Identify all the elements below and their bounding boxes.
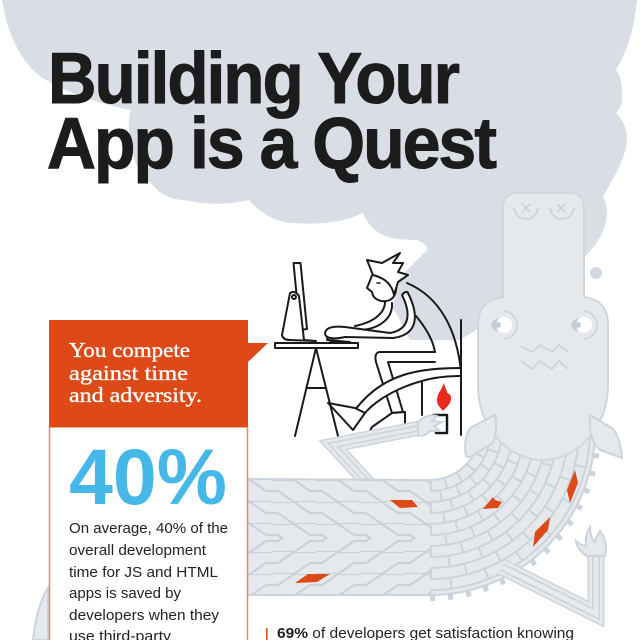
scale pattern: upper straight <box>60 480 431 538</box>
chair and wall <box>422 320 461 435</box>
monster head and neck <box>465 193 622 460</box>
top eyes closed <box>514 204 574 219</box>
monster tail <box>33 588 48 640</box>
front leg and foot <box>328 368 461 430</box>
floating cloud dot <box>590 267 602 279</box>
panel header with pointer <box>49 320 268 427</box>
panel text <box>69 520 228 640</box>
desk <box>275 343 358 436</box>
monster right claw <box>576 527 606 556</box>
panel heading <box>69 338 202 407</box>
panel: time and adversity <box>49 320 268 640</box>
thought cloud <box>2 0 637 340</box>
orange scales <box>295 470 578 583</box>
monster right arm <box>502 556 596 614</box>
wavy mouth <box>521 345 568 369</box>
scales outer spikes <box>430 430 597 597</box>
panel heading: against time <box>69 361 188 385</box>
monitor <box>282 263 316 341</box>
title: App is a Quest <box>47 104 497 184</box>
scaled torso <box>60 430 595 595</box>
panel text: developers when they <box>69 607 220 624</box>
left fin <box>465 415 496 457</box>
head and hair <box>367 253 408 301</box>
monster body <box>33 415 606 640</box>
torso and back <box>355 283 461 372</box>
scale pattern: lower straight <box>60 538 431 595</box>
panel text: overall development <box>69 542 207 559</box>
monster hand holding box <box>418 415 442 436</box>
title <box>47 39 497 184</box>
right fin <box>590 415 622 458</box>
stove box <box>433 415 447 433</box>
scale pattern: curved rings <box>430 430 590 590</box>
right eye <box>572 311 597 339</box>
title: Building Your <box>48 39 459 119</box>
panel text: apps is saved by <box>69 585 181 602</box>
panel text: On average, 40% of the <box>69 520 228 537</box>
back leg and foot <box>370 352 435 431</box>
near arm and hand <box>325 292 415 338</box>
panel body <box>50 427 248 640</box>
flame <box>437 383 451 411</box>
panel heading: You compete <box>69 338 190 362</box>
left eye <box>492 311 517 339</box>
monster left arm <box>333 428 420 494</box>
mouse <box>327 337 350 342</box>
illustration: developer at desk <box>275 253 461 436</box>
statistic 40%: 40% <box>69 432 227 521</box>
panel text: time for JS and HTML <box>69 564 218 581</box>
panel heading: and adversity. <box>69 383 202 407</box>
